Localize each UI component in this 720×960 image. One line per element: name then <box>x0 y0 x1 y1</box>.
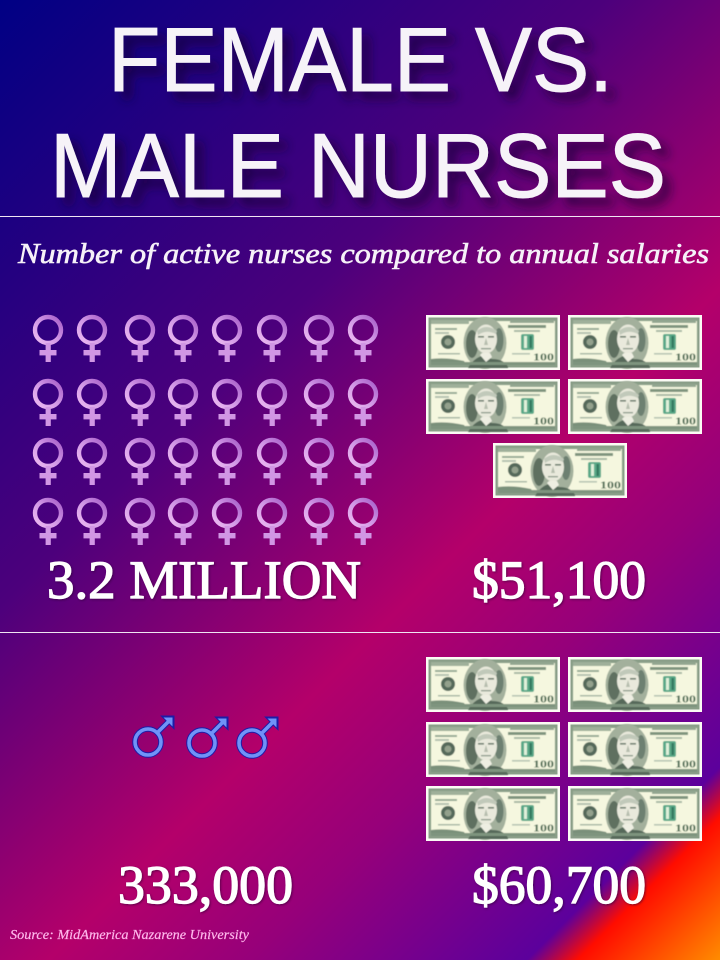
male nurse count: 333,000 <box>118 855 293 915</box>
female salary amount: $51,100 <box>472 550 646 610</box>
icons: male symbols <box>135 716 278 756</box>
female nurse count: 3.2 MILLION <box>47 550 361 610</box>
dollar bills: female salary <box>426 315 702 498</box>
title: MALE NURSES <box>50 116 666 217</box>
icon row 1 <box>35 317 376 362</box>
panel: female nurses count <box>35 317 376 610</box>
icon grid: female symbols <box>35 317 376 545</box>
panel: male salary <box>426 657 702 915</box>
panel: female salary <box>426 315 702 610</box>
icon row 4 <box>35 500 376 545</box>
subtitle: Number of active nurses compared to annual salaries <box>17 239 709 270</box>
source credit: Source: MidAmerica Nazarene University <box>10 928 250 943</box>
dollar bills: male salary <box>426 657 702 841</box>
title: FEMALE VS. <box>108 10 613 111</box>
panel: male nurses count <box>118 716 293 915</box>
title <box>50 10 666 217</box>
icon row 3 <box>35 440 376 485</box>
male salary amount: $60,700 <box>472 855 646 915</box>
icon row 2 <box>35 381 376 426</box>
